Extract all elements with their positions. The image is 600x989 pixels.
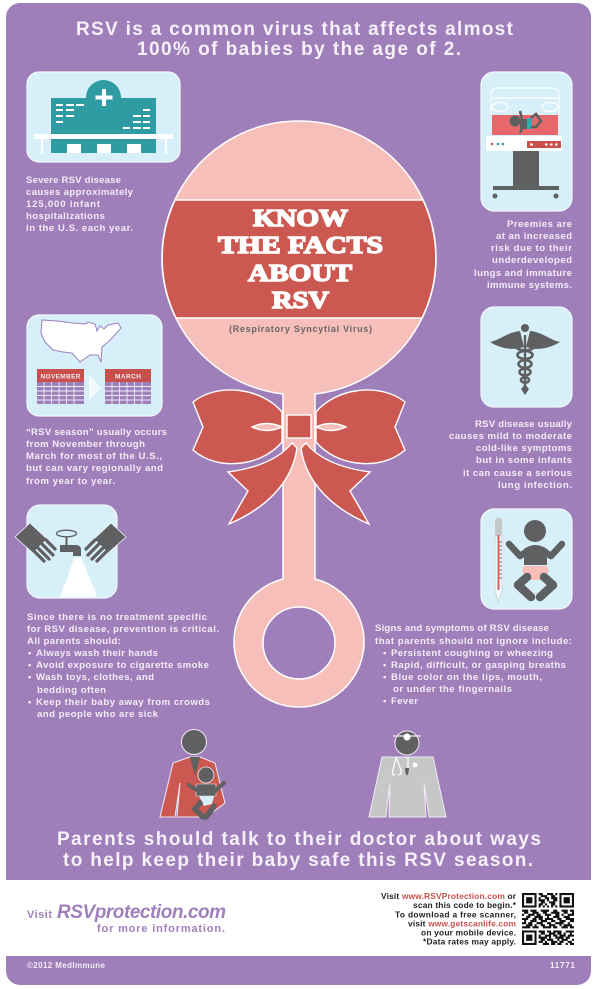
panel: hand washing xyxy=(15,505,126,598)
text: RSV disease: cold-like symptoms xyxy=(476,443,572,454)
text: hospitalizations xyxy=(26,175,134,234)
text: prevention: All parents should: xyxy=(27,636,121,647)
website call to action: RSVprotection.com xyxy=(57,902,226,923)
icon: incubator xyxy=(486,88,562,198)
panel: caduceus xyxy=(481,307,572,407)
text: prevention: Avoid exposure to cigarette smoke xyxy=(36,660,209,671)
panel: sick baby xyxy=(481,509,572,609)
text: RSV season: from November through xyxy=(26,439,145,450)
title: RSV is a common virus that affects almost xyxy=(76,19,514,40)
text: RSV season xyxy=(26,427,167,487)
text: RSV disease: it can cause a serious xyxy=(463,468,572,479)
closing message: Parents should talk to their doctor about ways xyxy=(57,829,541,850)
scan instructions: To download a free scanner, xyxy=(395,910,516,920)
text: RSV disease: but in some infants xyxy=(476,455,572,466)
text: prevention: Keep their baby away from crowds xyxy=(36,697,210,708)
closing message: to help keep their baby safe this RSV season. xyxy=(63,850,533,871)
website call to action xyxy=(27,902,226,935)
closing message xyxy=(57,829,541,871)
text: signs and symptoms xyxy=(375,623,572,707)
baby rattle xyxy=(162,121,436,707)
footer: code: 11771 xyxy=(550,961,576,970)
scan instructions: Visit www.RSVProtection.com or xyxy=(381,891,517,901)
text: signs and symptoms: • xyxy=(383,672,387,683)
panel: hospital xyxy=(27,72,180,162)
text: preemies: immune systems. xyxy=(487,280,572,291)
heading: know the facts about RSV xyxy=(218,206,383,314)
text: RSV season: March for most of the U.S., xyxy=(26,451,162,462)
icon: right hand xyxy=(86,523,126,561)
bow xyxy=(193,390,405,524)
icon: US map xyxy=(41,320,121,362)
text: signs and symptoms: Persistent coughing or wheezing xyxy=(391,648,553,659)
text: signs and symptoms: Blue color on the lips, mouth, xyxy=(391,672,542,683)
text: prevention: and people who are sick xyxy=(37,709,159,720)
scan instructions: *Data rates may apply. xyxy=(423,936,516,946)
text: RSV disease: lung infection. xyxy=(498,480,572,491)
text: signs and symptoms: Signs and symptoms of RSV disease xyxy=(375,623,549,634)
icon: thermometer xyxy=(495,518,502,602)
scan instructions: visit www.getscanlife.com xyxy=(408,918,516,928)
text: preemies xyxy=(474,219,572,291)
calendar: November: NOVEMBER xyxy=(40,374,81,380)
text: prevention xyxy=(27,612,219,720)
text: preemies: Preemies are xyxy=(507,219,572,230)
panel: RSV season xyxy=(27,315,162,416)
text: preemies: underdeveloped xyxy=(492,255,572,266)
text: signs and symptoms: Fever xyxy=(391,696,418,707)
text: hospitalizations: in the U.S. each year. xyxy=(26,223,133,234)
arrow: November to March xyxy=(89,375,101,401)
heading: know the facts about RSV: RSV xyxy=(272,288,330,314)
text: prevention: Wash toys, clothes, and xyxy=(36,672,154,683)
icon: parent holding baby xyxy=(160,730,225,817)
text: prevention: • xyxy=(28,672,32,683)
icon: faucet xyxy=(56,530,81,556)
text: RSV disease: causes mild to moderate xyxy=(449,431,572,442)
text: RSV disease xyxy=(449,419,573,491)
icon: baby xyxy=(509,520,562,597)
panel: incubator xyxy=(481,72,572,211)
text: preemies: risk due to their xyxy=(491,243,572,254)
text: signs and symptoms: • xyxy=(383,660,387,671)
text: prevention: • xyxy=(28,697,32,708)
text: prevention: bedding often xyxy=(37,685,106,696)
text: hospitalizations: causes approximately xyxy=(26,187,134,198)
website call to action: for more information. xyxy=(97,923,225,935)
scan instructions: scan this code to begin.* xyxy=(413,900,517,910)
text: preemies: at an increased xyxy=(496,231,572,242)
panel: white footer band xyxy=(6,880,591,956)
scan instructions xyxy=(381,891,517,946)
footer: copyright: ©2012 MedImmune xyxy=(27,961,106,970)
icon: caduceus xyxy=(490,324,560,395)
text: prevention: • xyxy=(28,648,32,659)
text: signs and symptoms: • xyxy=(383,648,387,659)
text: preemies: lungs and immature xyxy=(474,268,572,279)
heading: know the facts about RSV: KNOW xyxy=(253,206,348,232)
text: signs and symptoms: • xyxy=(383,696,387,707)
text: signs and symptoms: or under the fingernails xyxy=(393,684,512,695)
text: signs and symptoms: Rapid, difficult, or gasping breaths xyxy=(391,660,566,671)
text: prevention: • xyxy=(28,660,32,671)
title: 100% of babies by the age of 2. xyxy=(137,39,461,60)
text: prevention: for RSV disease, prevention is critical. xyxy=(27,624,219,635)
text: RSV season: from year to year. xyxy=(26,476,115,487)
heading: know the facts about RSV: THE FACTS xyxy=(218,233,383,259)
subtitle: respiratory syncytial virus: (Respiratory Syncytial Virus) xyxy=(229,324,372,334)
QR code xyxy=(522,894,574,944)
heading: know the facts about RSV: ABOUT xyxy=(248,261,352,287)
icon: water xyxy=(60,558,97,597)
icon: hospital xyxy=(34,80,173,154)
icon: left hand xyxy=(15,523,55,561)
text: prevention: Always wash their hands xyxy=(36,648,158,659)
website call to action: Visit xyxy=(27,909,52,921)
text: RSV season: but can vary regionally and xyxy=(26,463,163,474)
text: hospitalizations: Severe RSV disease xyxy=(26,175,121,186)
rattle red band xyxy=(162,200,436,318)
text: signs and symptoms: that parents should not ignore include: xyxy=(375,636,572,647)
text: RSV season: “RSV season” usually occurs xyxy=(26,427,167,438)
scan instructions: on your mobile device. xyxy=(421,928,516,938)
calendar: March: MARCH xyxy=(115,374,141,380)
icon: doctor xyxy=(369,731,446,817)
text: hospitalizations: hospitalizations xyxy=(26,211,105,222)
text: RSV disease: RSV disease usually xyxy=(475,419,573,430)
text: hospitalizations: 125,000 infant xyxy=(26,199,101,210)
text: prevention: Since there is no treatment specific xyxy=(27,612,208,623)
title xyxy=(76,19,514,60)
